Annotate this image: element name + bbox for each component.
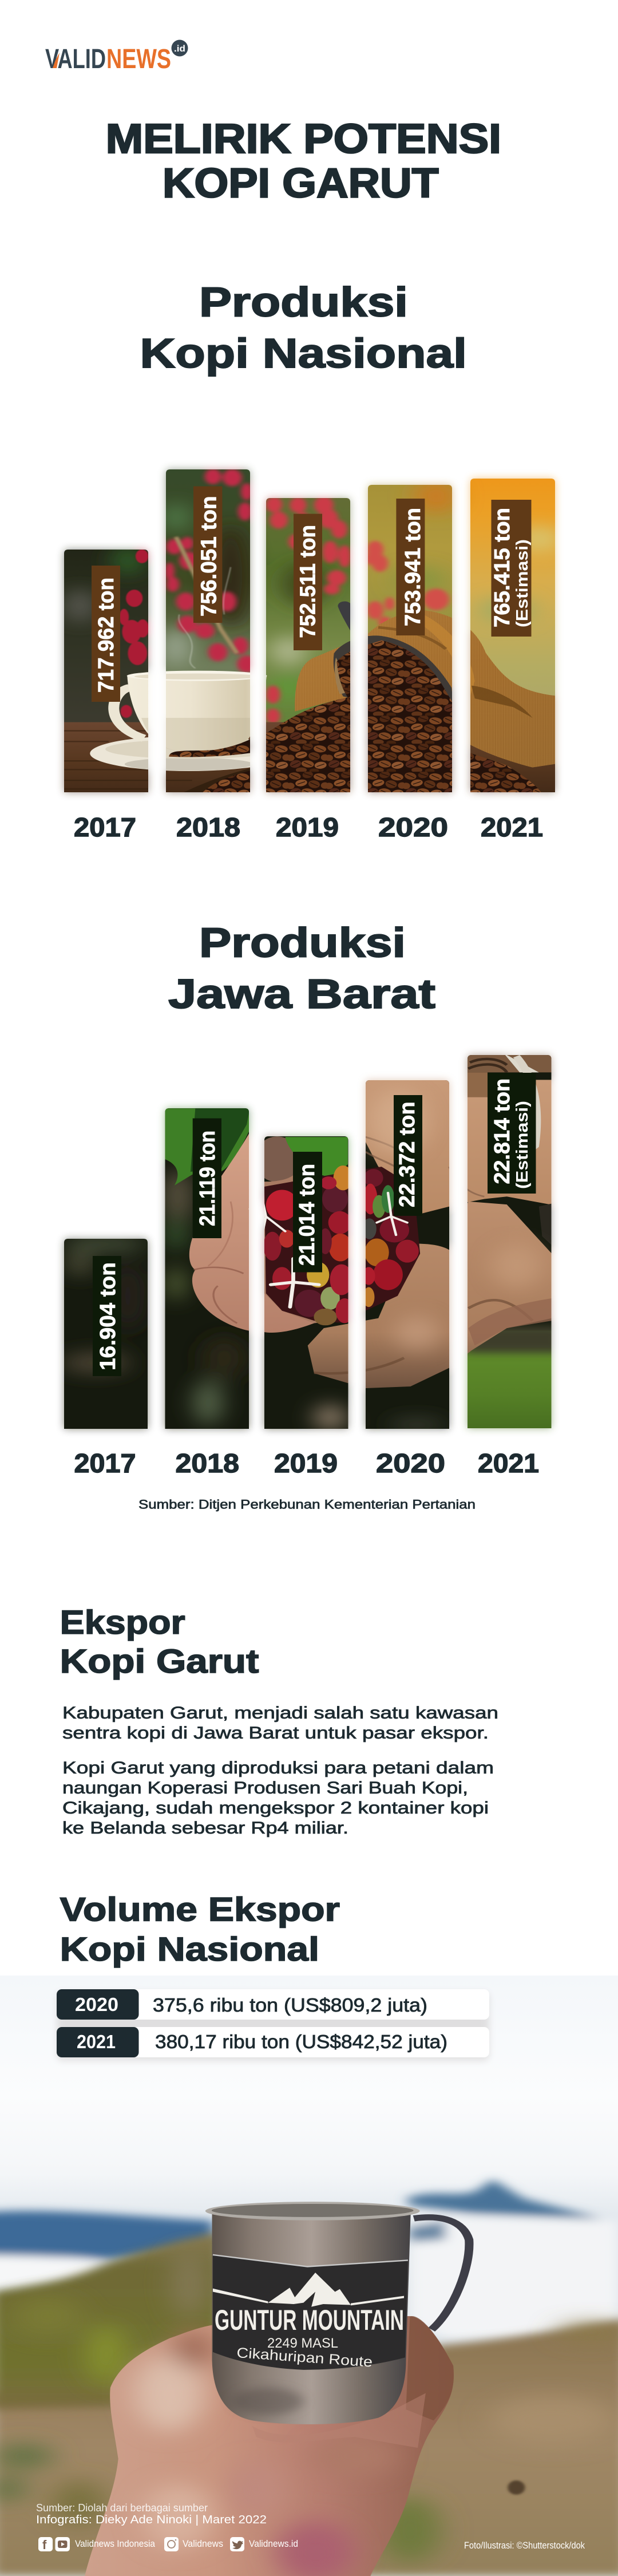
mug text: 2249 MASL [267, 2336, 338, 2351]
value label 2021 [488, 1073, 536, 1194]
title [106, 116, 501, 206]
photo: hand holding a Guntur Mountain mug [0, 1976, 618, 2576]
logo badge .id: .id [174, 44, 185, 54]
row shadow [57, 1992, 489, 2061]
social handles: Validnews Indonesia [75, 2538, 155, 2549]
heading: Ekspor Kopi Garut [60, 1604, 259, 1680]
title: KOPI GARUT [163, 160, 439, 206]
mug rim [205, 2202, 420, 2221]
icon: facebook: f [42, 2538, 47, 2552]
photo bars: hands holding coffee cherries [57, 1048, 561, 1437]
social handles: Validnews [183, 2538, 223, 2549]
value label 2021: (Estimasi) [513, 1101, 532, 1189]
footer credits: Infografis: Dieky Ade Ninoki | Maret 2022 [36, 2514, 267, 2526]
year labels: 2017 [74, 1448, 136, 1478]
title: MELIRIK POTENSI [106, 116, 501, 162]
row 2021: 2021 [77, 2031, 116, 2052]
value label 2019: 752.511 ton [296, 525, 320, 638]
year labels: 2019 [276, 812, 339, 842]
photo bars: coffee cup, cherries, beans and sack [57, 464, 561, 801]
ground [0, 2319, 618, 2576]
heading: Produksi Kopi Nasional: Produksi [199, 280, 408, 326]
mug label band [213, 2255, 408, 2370]
icon: twitter [230, 2537, 244, 2551]
row 2021: 380,17 ribu ton (US$842,52 juta) [155, 2031, 447, 2052]
year labels: 2019 [274, 1448, 338, 1478]
logo: Validnews.id [45, 40, 188, 74]
bar shadow glow [57, 1048, 561, 1437]
value label 2020: 753.941 ton [401, 508, 425, 626]
heading: Produksi Jawa Barat: Produksi [199, 920, 406, 966]
row 2021 [57, 2027, 489, 2057]
photo credit: Foto/Ilustrasi: ©Shutterstock/dok [464, 2540, 585, 2551]
heading: Ekspor Kopi Garut: Ekspor [60, 1604, 185, 1641]
year labels [74, 812, 543, 842]
heading: Produksi Jawa Barat [168, 920, 435, 1017]
hand [85, 2316, 454, 2576]
social handles [75, 2538, 298, 2549]
sky [0, 1976, 618, 2576]
clouds and distant mountains [0, 2179, 618, 2338]
chart: national production bars [57, 464, 561, 842]
footer credits [36, 2502, 267, 2526]
export rows [57, 1989, 489, 2061]
heading: Volume Ekspor Kopi Nasional: Kopi Nasional [60, 1931, 319, 1968]
heading: Produksi Jawa Barat: Jawa Barat [168, 971, 435, 1017]
body text: Cikajang, sudah mengekspor 2 kontainer kopi [62, 1799, 489, 1818]
icon: instagram [164, 2537, 179, 2551]
icon: facebook [38, 2537, 53, 2552]
source note: Sumber: Ditjen Perkebunan Kementerian Pertanian [138, 1498, 476, 1511]
body text: ke Belanda sebesar Rp4 miliar. [62, 1819, 348, 1838]
mug body [212, 2212, 411, 2424]
bar glow [57, 464, 561, 801]
footer credits: Sumber: Diolah dari berbagai sumber [36, 2502, 208, 2514]
icon: youtube [55, 2537, 70, 2551]
row 2020: 2020 [75, 1994, 118, 2015]
heading: Ekspor Kopi Garut: Kopi Garut [60, 1643, 259, 1680]
body text: sentra kopi di Jawa Barat untuk pasar ekspor. [62, 1724, 489, 1743]
logo wordmark VALID: VALID [45, 44, 106, 74]
value label 2019: 21.014 ton [295, 1164, 319, 1266]
value label 2018: 21.119 ton [196, 1131, 220, 1226]
mug text [215, 2304, 404, 2370]
year labels: 2020 [376, 1448, 445, 1478]
row 2020: 375,6 ribu ton (US$809,2 juta) [153, 1994, 427, 2016]
social links [38, 2537, 298, 2552]
logo wordmark NEWS: NEWS [106, 44, 171, 74]
year labels: 2020 [378, 812, 448, 842]
logo accent on the V [53, 53, 60, 68]
logo badge .id [172, 40, 188, 56]
mug text: Cikahuripan Route [236, 2345, 373, 2370]
value label 2020: 22.372 ton [395, 1101, 419, 1207]
body text: naungan Koperasi Produsen Sari Buah Kopi, [62, 1779, 468, 1797]
body text [62, 1704, 498, 1838]
value label 2021: (Estimasi) [513, 539, 532, 627]
row 2020 [57, 1989, 489, 2020]
value label 2017: 717.962 ton [94, 578, 118, 693]
year labels: 2017 [74, 812, 136, 842]
year labels [74, 1448, 539, 1478]
year labels: 2021 [481, 812, 543, 842]
green ridge [0, 2231, 221, 2420]
mug text: GUNTUR MOUNTAIN [215, 2304, 404, 2336]
year labels: 2018 [176, 812, 240, 842]
body text: Kabupaten Garut, menjadi salah satu kawasan [62, 1704, 498, 1722]
mug mountain emblem [213, 2273, 404, 2307]
heading: Produksi Kopi Nasional: Kopi Nasional [140, 331, 467, 377]
year labels: 2018 [175, 1448, 239, 1478]
social handles: Validnews.id [249, 2538, 298, 2549]
value label 2018: 756.051 ton [197, 496, 221, 617]
value label 2021: 765.415 ton [490, 508, 514, 627]
body text: Kopi Garut yang diproduksi para petani dalam [62, 1759, 494, 1777]
value label 2017: 16.904 ton [96, 1262, 120, 1370]
chart: West Java production bars [57, 1048, 561, 1478]
heading: Produksi Kopi Nasional [140, 280, 467, 377]
year labels: 2021 [478, 1448, 539, 1478]
heading: Volume Ekspor Kopi Nasional [60, 1891, 340, 1968]
value label 2021: 22.814 ton [490, 1078, 514, 1184]
heading: Volume Ekspor Kopi Nasional: Volume Ekspor [60, 1891, 340, 1928]
mug handle [414, 2217, 469, 2330]
value label 2021 [490, 500, 532, 637]
